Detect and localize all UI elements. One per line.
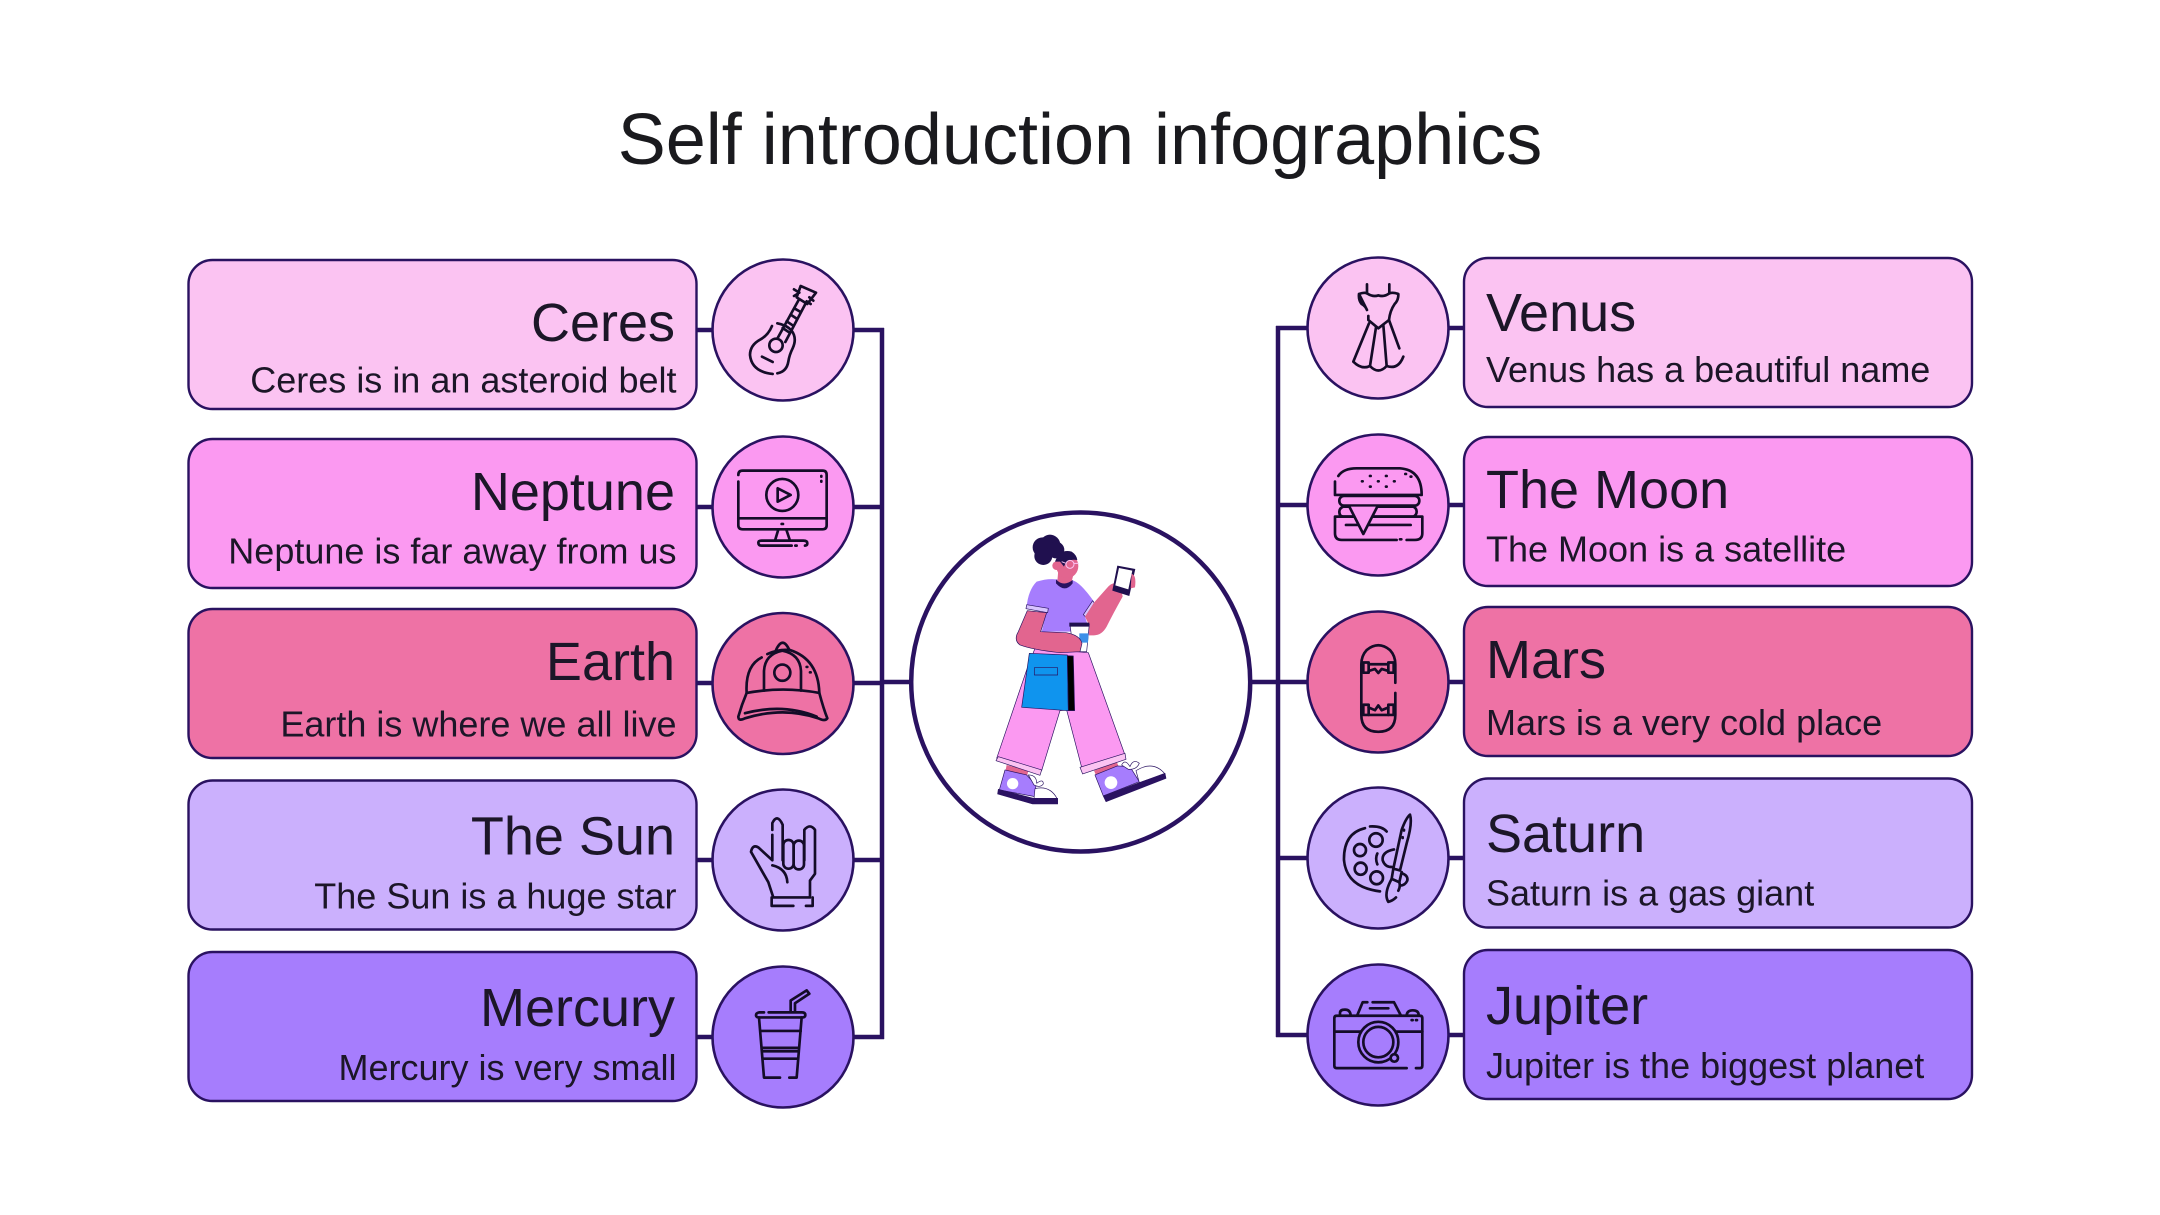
panel: Saturn: Saturn [1486,804,1645,864]
panel: Venus [1464,258,1972,407]
panel: Earth [188,609,696,758]
trouser cuffs [996,757,1042,775]
trousers [997,648,1125,771]
circle: The Sun [712,790,854,930]
coffee cup [1070,624,1089,652]
shopping bag [1022,653,1068,711]
icon: skateboard [1361,645,1395,732]
panel: Mercury: Mercury is very small [338,1047,676,1088]
circle: Mercury [712,966,854,1108]
glasses [1062,560,1079,568]
circle: Earth [712,613,854,754]
illustration: woman walking with phone and coffee [996,535,1166,804]
hair [1033,535,1077,567]
panel: The Moon: The Moon is a satellite [1486,528,1846,570]
phone [1112,566,1135,596]
icon: dress [1353,284,1403,370]
circle: Saturn [1308,788,1448,928]
connectors: left tree [697,328,910,1039]
panel: Ceres [188,260,696,409]
panel: Earth: Earth is where we all live [280,704,676,744]
panel: The Sun: The Sun [471,806,675,866]
t-shirt [1027,579,1094,632]
panel: Saturn [1464,778,1972,928]
icon: camera [1334,1002,1422,1068]
panel: Neptune: Neptune is far away from us [228,530,676,572]
circle: Venus [1308,258,1448,398]
panel: Neptune: Neptune [471,462,675,522]
connectors: right tree [1252,326,1463,1037]
right shoe [1095,761,1166,802]
icon: cap [738,643,827,720]
panel: Venus: Venus has a beautiful name [1486,349,1930,390]
panel: Mars: Mars [1486,630,1606,690]
panel: Mercury [188,952,696,1101]
panel: Jupiter [1464,950,1972,1099]
panel: Mars: Mars is a very cold place [1486,702,1882,743]
panel: The Moon [1464,437,1972,586]
neck and head [1057,570,1073,585]
icon: burger [1335,468,1422,540]
icon: monitor with play button [738,471,827,546]
lower arm [1016,611,1082,653]
circle: Neptune [712,436,854,578]
panel: Mars [1464,607,1972,756]
panel: Mercury: Mercury [480,978,675,1038]
title: Self introduction infographics [618,100,1542,180]
circle: Ceres [712,260,854,400]
panel: Jupiter: Jupiter [1486,976,1648,1036]
icon: guitar [750,286,816,374]
raised arm [1085,583,1123,635]
panel: Ceres: Ceres is in an asteroid belt [250,360,676,400]
circle: Mars [1308,612,1448,752]
panel: Jupiter: Jupiter is the biggest planet [1486,1045,1924,1086]
panel: Neptune [188,439,696,588]
panel: Saturn: Saturn is a gas giant [1486,872,1814,914]
center circle [911,512,1250,852]
panel: The Moon: The Moon [1486,460,1729,520]
panel: Ceres: Ceres [531,293,675,353]
panel: The Sun: The Sun is a huge star [314,876,677,916]
circle: The Moon [1308,434,1448,576]
icon: paint palette [1344,815,1411,902]
icon: rock hand [751,818,815,906]
panel: Earth: Earth [546,632,675,692]
panel: The Sun [188,780,696,930]
panel: Venus: Venus [1486,283,1636,343]
icon: drink cup [756,990,809,1078]
circle: Jupiter [1308,964,1448,1106]
ankles [1005,762,1119,778]
left shoe [998,770,1058,804]
